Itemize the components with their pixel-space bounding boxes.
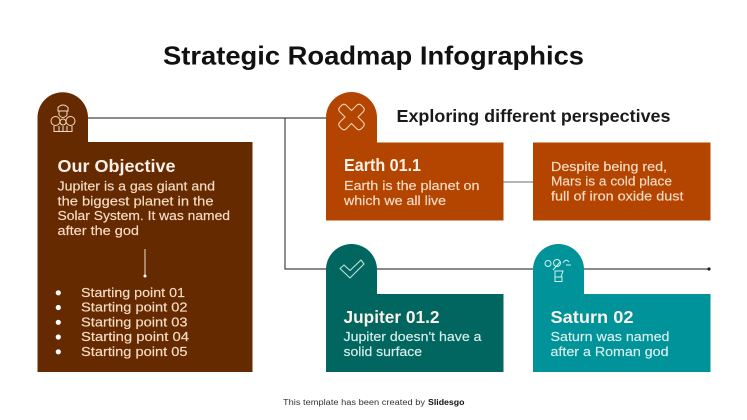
heading: exploring different perspectives: Exploring different perspectives (396, 106, 671, 126)
title: Strategic Roadmap Infographics (163, 40, 584, 70)
text block: objective description: after the god (58, 223, 139, 238)
footer credit: Slidesgo (428, 398, 465, 407)
panel: saturn (533, 244, 710, 372)
text block: objective description: the biggest planet in the (58, 193, 213, 208)
text block: mars: Despite being red, (551, 159, 667, 174)
text block: earth (343, 178, 480, 208)
text block: saturn: Saturn was named (550, 329, 670, 344)
list: starting points: Starting point 03 (81, 314, 188, 330)
heading: our objective: Our Objective (58, 156, 176, 176)
text block: objective description (58, 178, 230, 238)
text block: jupiter: Jupiter doesn't have a (344, 329, 482, 344)
list: starting points: Starting point 02 (81, 300, 188, 315)
text block: jupiter: solid surface (344, 344, 422, 359)
list: starting points: Starting point 01 (81, 285, 185, 300)
panel: our objective (38, 92, 252, 372)
text block: earth: which we all live (343, 193, 446, 208)
panel: mars (533, 142, 710, 220)
footer credit (283, 398, 465, 407)
text block: objective description: Solar System. It was named (58, 208, 230, 223)
list: starting points: Starting point 05 (81, 344, 188, 359)
list: starting points (56, 285, 189, 359)
icon: check mark (340, 260, 364, 278)
text block: mars: full of iron oxide dust (551, 188, 684, 204)
text block: saturn: after a Roman god (550, 344, 668, 359)
inner connector arrow (144, 249, 146, 278)
heading: earth: Earth 01.1 (344, 155, 421, 175)
text block: earth: Earth is the planet on (344, 178, 480, 193)
text block: mars (551, 159, 684, 204)
text block: mars: Mars is a cold place (551, 174, 672, 189)
heading: jupiter: Jupiter 01.2 (344, 307, 440, 327)
list: starting points: Starting point 04 (81, 329, 189, 344)
text block: saturn (550, 329, 670, 359)
panel: jupiter (326, 244, 504, 372)
icon: cross (339, 104, 364, 130)
connector lines (88, 118, 711, 271)
footer credit: This template has been created by (283, 398, 425, 407)
text block: jupiter (344, 329, 482, 359)
heading: saturn: Saturn 02 (550, 307, 634, 327)
icon: worker with gears (51, 105, 75, 132)
text block: objective description: Jupiter is a gas giant and (58, 178, 215, 194)
panel: earth (326, 92, 504, 221)
icon: hand with idea (545, 260, 571, 282)
